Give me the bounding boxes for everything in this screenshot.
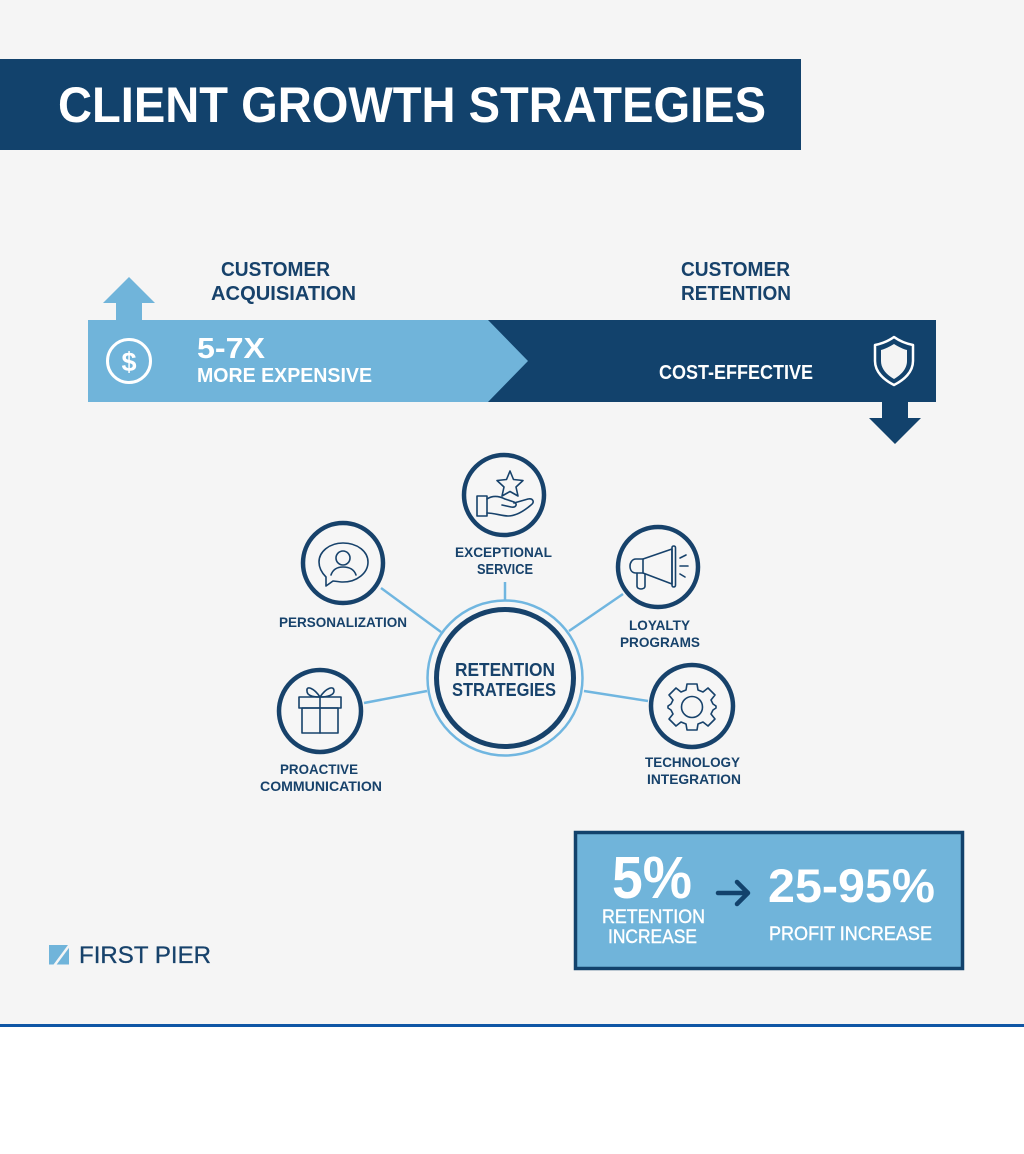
customer acquisition arrow segment bbox=[88, 320, 528, 402]
stat: 5% retention increase bbox=[602, 845, 705, 948]
node: personalization: PERSONALIZATION bbox=[279, 614, 407, 630]
retention heading: CUSTOMER bbox=[681, 259, 791, 281]
stat: 5% retention increase: INCREASE bbox=[608, 926, 697, 948]
node: proactive communication: PROACTIVE bbox=[280, 761, 358, 777]
stat: 25-95% profit increase: 25-95% bbox=[768, 859, 935, 912]
acquisition heading bbox=[211, 259, 356, 305]
node: personalization bbox=[279, 523, 407, 630]
icon: dollar coin bbox=[108, 340, 150, 382]
acquisition heading: ACQUISIATION bbox=[211, 283, 356, 305]
icon: shield bbox=[875, 337, 913, 385]
central hub circle: STRATEGIES bbox=[452, 680, 556, 700]
bottom rule bbox=[0, 1024, 1024, 1027]
title: CLIENT GROWTH STRATEGIES bbox=[58, 77, 766, 133]
node: proactive communication: COMMUNICATION bbox=[260, 778, 382, 794]
node: loyalty programs: LOYALTY bbox=[629, 617, 691, 633]
hub diagram: retention strategies bbox=[260, 455, 741, 794]
connector lines bbox=[364, 582, 648, 703]
panel: cost comparison bar bbox=[88, 259, 936, 444]
retention heading bbox=[681, 259, 791, 305]
node: technology integration bbox=[645, 665, 741, 787]
acquisition stat: 5-7X bbox=[197, 333, 266, 365]
node: exceptional service: EXCEPTIONAL bbox=[455, 544, 552, 560]
icon: gift box bbox=[299, 688, 341, 733]
arrow: down bbox=[869, 402, 921, 444]
node: loyalty programs: PROGRAMS bbox=[620, 634, 700, 650]
panel: profit stat box bbox=[576, 832, 962, 968]
customer retention bar segment bbox=[480, 320, 936, 402]
icon: dollar coin: $ bbox=[121, 347, 137, 377]
stat: 5% retention increase: RETENTION bbox=[602, 906, 705, 928]
icon: speech bubble with person bbox=[319, 543, 368, 586]
acquisition stat: MORE EXPENSIVE bbox=[197, 364, 372, 387]
node: loyalty programs bbox=[618, 527, 700, 650]
stat: 25-95% profit increase: PROFIT INCREASE bbox=[769, 923, 932, 945]
stat: 25-95% profit increase bbox=[768, 859, 935, 945]
icon: gear bbox=[668, 684, 716, 730]
node: technology integration: INTEGRATION bbox=[647, 771, 741, 787]
node: exceptional service bbox=[455, 455, 552, 578]
icon: megaphone bbox=[630, 546, 688, 589]
central hub circle: RETENTION bbox=[455, 660, 555, 680]
arrow: up bbox=[103, 277, 155, 320]
arrow: right bbox=[718, 882, 748, 904]
logo: First Pier: FIRST PIER bbox=[79, 942, 211, 969]
central hub circle bbox=[428, 600, 582, 756]
node: exceptional service: SERVICE bbox=[477, 562, 533, 578]
node: proactive communication bbox=[260, 670, 382, 794]
title banner bbox=[0, 59, 801, 150]
retention heading: RETENTION bbox=[681, 283, 791, 305]
icon: hand with star bbox=[477, 471, 533, 516]
acquisition stat bbox=[197, 333, 372, 387]
retention stat: COST-EFFECTIVE bbox=[659, 362, 813, 384]
icon: logo mark bbox=[49, 943, 71, 966]
acquisition heading: CUSTOMER bbox=[221, 259, 331, 281]
node: technology integration: TECHNOLOGY bbox=[645, 754, 741, 770]
stat: 5% retention increase: 5% bbox=[612, 845, 692, 911]
